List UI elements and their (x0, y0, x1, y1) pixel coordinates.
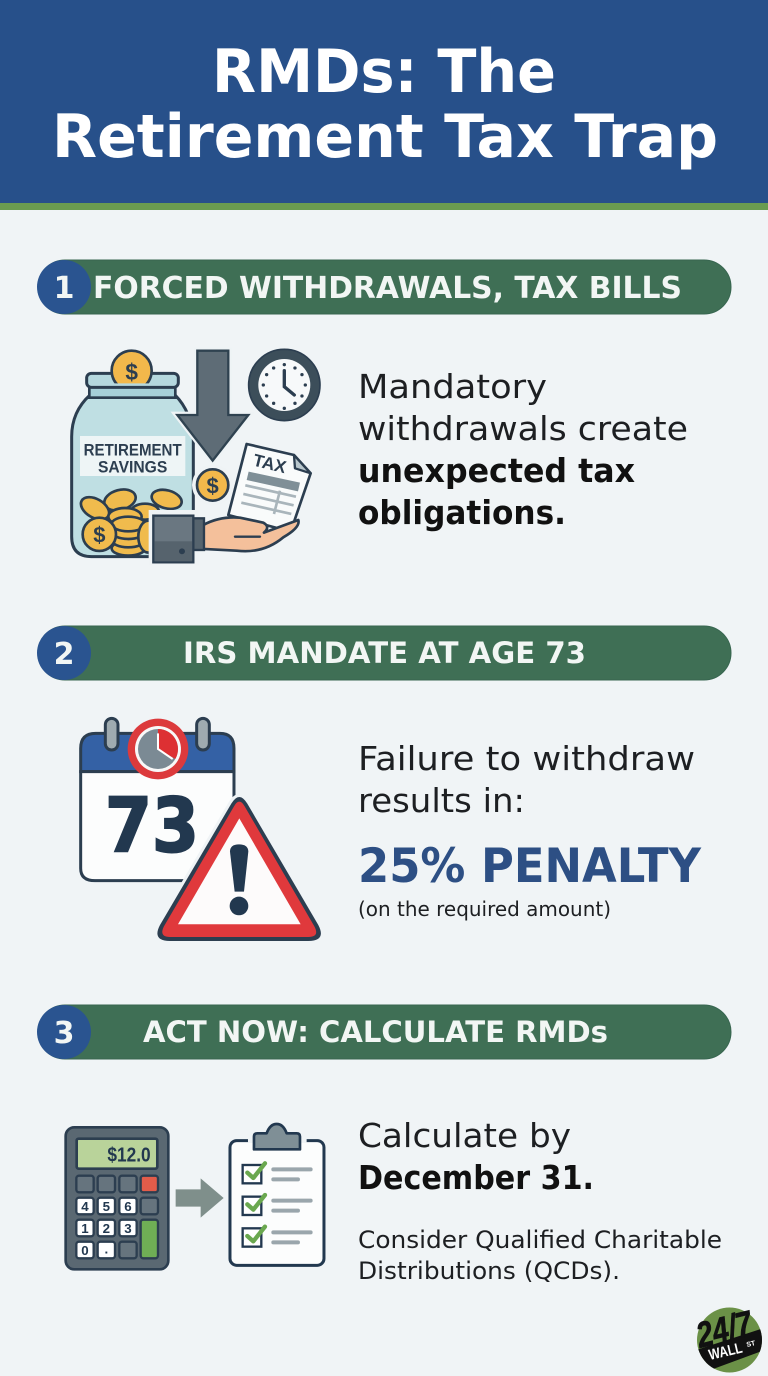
icon: calculator (66, 1127, 168, 1269)
text: section 1 description: obligations. (358, 493, 566, 532)
icon: calculator: 5 (103, 1199, 111, 1214)
icon: checklist clipboard (230, 1124, 324, 1265)
icon: calculator, arrow and checklist (66, 1124, 324, 1269)
logo: 24/7 Wall St: 24/7 (691, 1302, 758, 1356)
icon: tax form (228, 444, 311, 532)
icon: calculator: 3 (124, 1221, 132, 1236)
text: section 3 description: Distributions (QCDs). (358, 1257, 620, 1285)
logo: 24/7 Wall St: ST (746, 1340, 757, 1349)
text: section 1 description (358, 367, 688, 532)
section 3 header pill (37, 1005, 731, 1059)
section 3 header pill: 3 (54, 1016, 74, 1051)
header banner (0, 0, 768, 210)
section 1 header pill: 1 (54, 271, 74, 306)
text: section 2 description: (on the required amount) (358, 897, 611, 921)
text: section 2 description: results in: (358, 781, 525, 820)
icon: falling coin (192, 464, 233, 506)
icon: coin pile (77, 486, 184, 556)
title (52, 37, 718, 172)
icon: clock (249, 349, 320, 421)
text: section 1 description: withdrawals create (358, 409, 688, 448)
icon: tax form: TAX (251, 450, 289, 477)
text: section 1 description: Mandatory (358, 367, 547, 406)
icon: jar: RETIREMENT (84, 440, 182, 459)
section 1 header pill (37, 260, 731, 314)
section 3 header pill: ACT NOW: CALCULATE RMDs (143, 1015, 608, 1049)
icon: retirement savings jar, arrow, clock, tax form and hand: $ (93, 523, 105, 548)
logo: 24/7 Wall St (697, 1308, 762, 1372)
icon: red clock (128, 719, 188, 779)
icon: falling coin: $ (207, 473, 219, 498)
text: section 2 description (358, 739, 702, 921)
text: section 3 description: December 31. (358, 1158, 594, 1197)
title: Retirement Tax Trap (52, 102, 718, 172)
icon: calculator: 2 (103, 1221, 110, 1236)
logo: 24/7 Wall St: WALL (707, 1340, 744, 1364)
icon: jar (72, 351, 193, 557)
icon: calculator: 1 (81, 1221, 89, 1236)
icon: calculator: 6 (124, 1199, 132, 1214)
icon: calculator: . (104, 1241, 108, 1256)
icon: calculator: 4 (81, 1199, 89, 1214)
icon: jar: $ (125, 359, 138, 385)
icon: calculator: 0 (81, 1243, 89, 1258)
icon: calendar 73 with warning triangle (81, 718, 321, 941)
icon: warning triangle (157, 797, 321, 941)
section 1 header pill: FORCED WITHDRAWALS, TAX BILLS (93, 271, 682, 306)
icon: calendar (81, 718, 234, 881)
text: section 3 description: Consider Qualified Charitable (358, 1226, 722, 1254)
section 2 header pill: 2 (54, 637, 74, 672)
icon: calendar: 73 (105, 782, 199, 870)
icon: calculator: $12.0 (107, 1143, 151, 1166)
icon: retirement savings jar, arrow, clock, tax form and hand (72, 349, 320, 565)
section 2 header pill (37, 626, 731, 680)
penalty figure: 25% PENALTY (358, 839, 702, 894)
text: section 2 description: Failure to withdraw (358, 739, 695, 778)
title: RMDs: The (212, 37, 556, 107)
icon: jar: SAVINGS (98, 458, 167, 477)
text: section 3 description (358, 1116, 722, 1285)
icon: grey arrow (176, 1178, 224, 1218)
text: section 1 description: unexpected tax (358, 451, 635, 490)
icon: down arrow (177, 351, 248, 461)
section 2 header pill: IRS MANDATE AT AGE 73 (183, 636, 586, 670)
text: section 3 description: Calculate by (358, 1116, 571, 1155)
icon: hand and cuff (149, 510, 299, 565)
